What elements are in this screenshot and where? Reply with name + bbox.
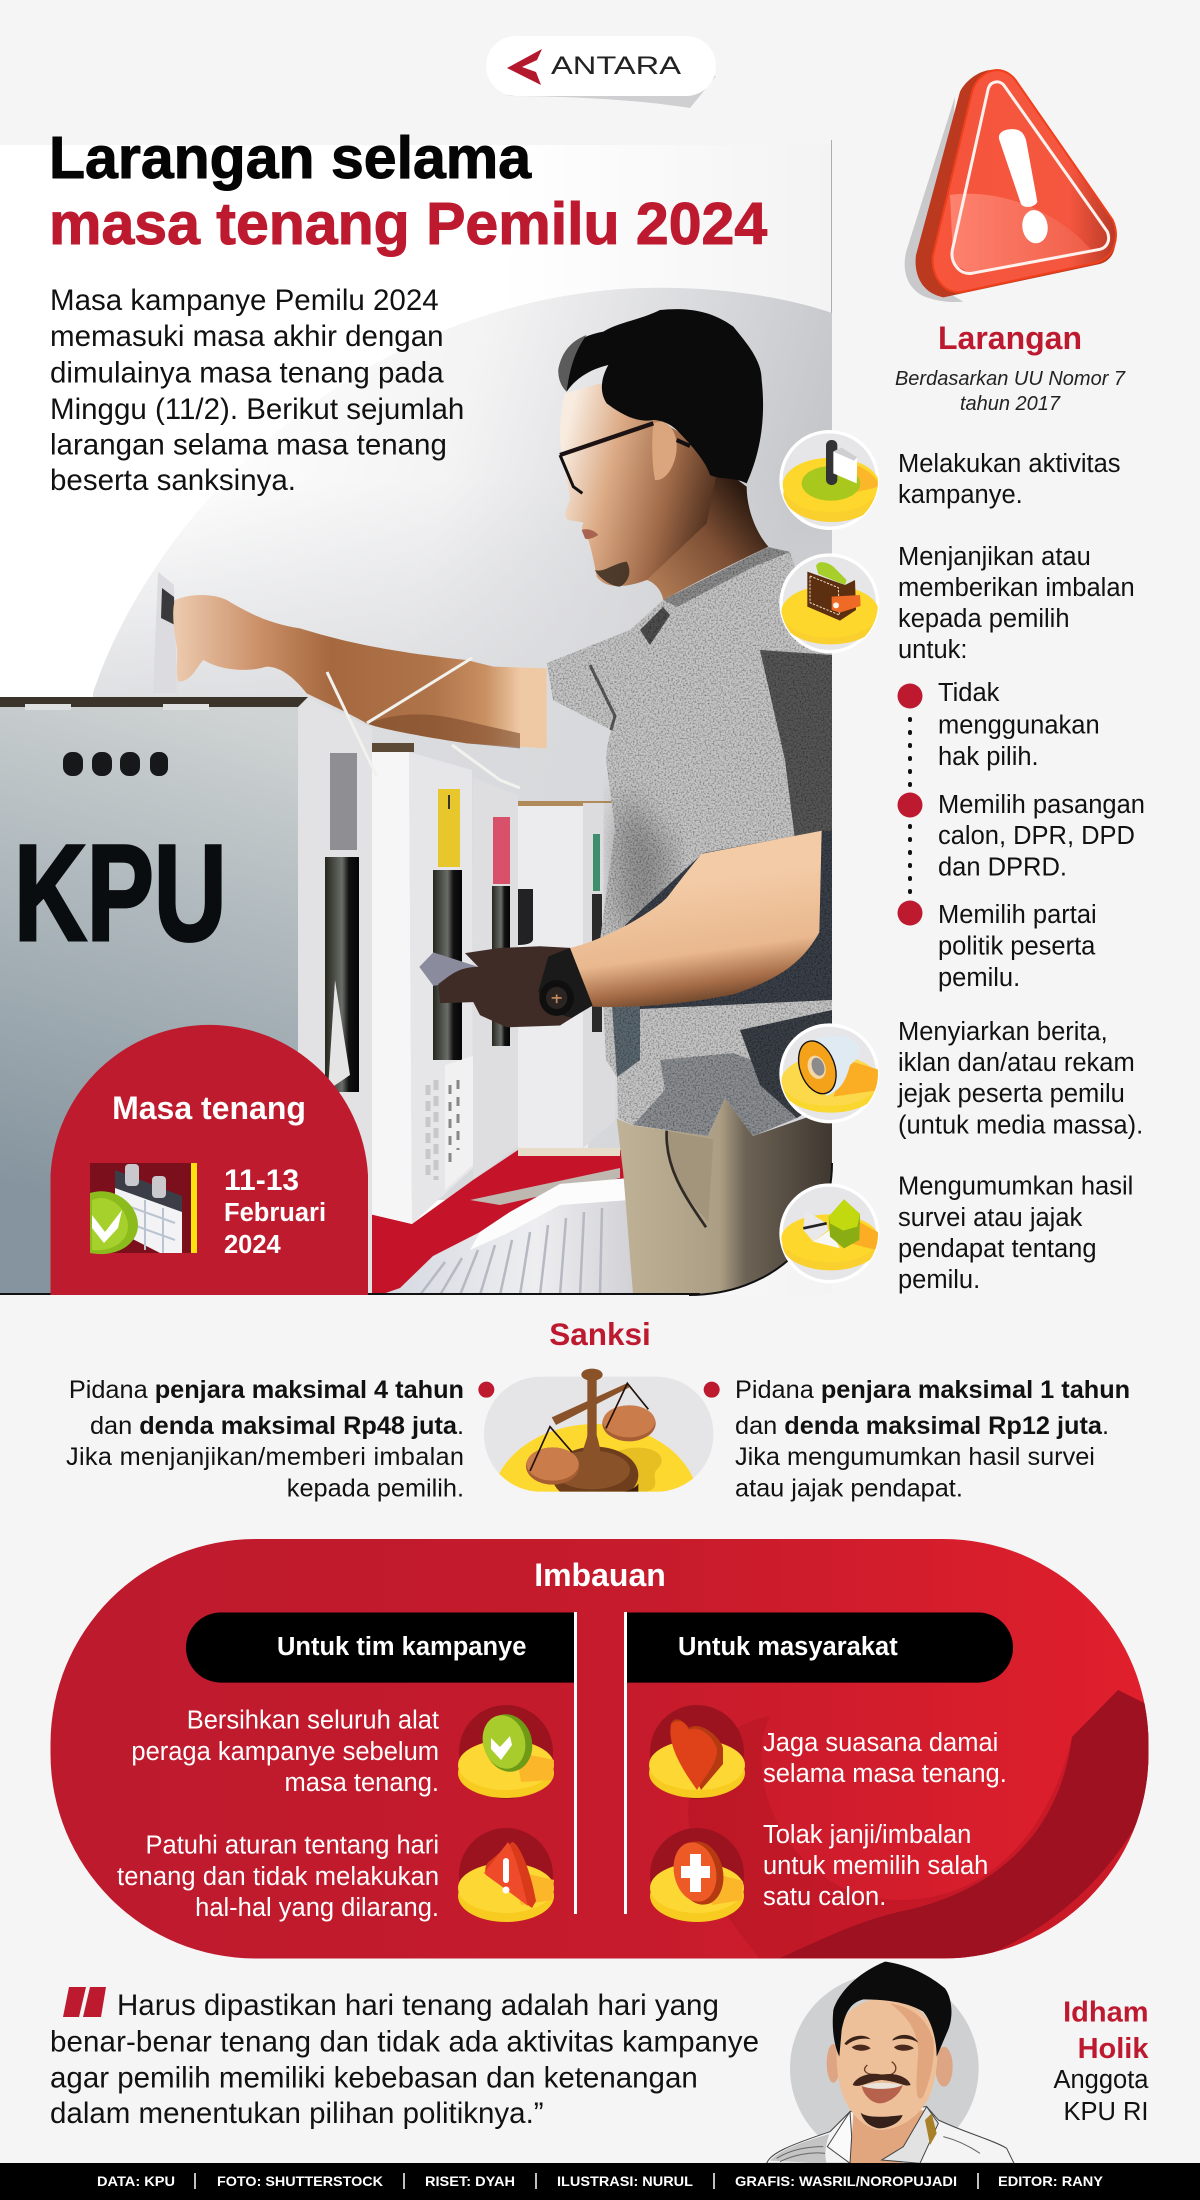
speaker name and role: Anggota [1053, 2066, 1149, 2094]
sanction text: left: Pidana penjara maksimal 4 tahun [69, 1376, 464, 1404]
icon: wallet on yellow disc [779, 553, 879, 653]
list: prohibitions: dan DPRD. [938, 854, 1067, 882]
icon: heart [649, 1705, 745, 1799]
list: prohibitions: Menyiarkan berita, [898, 1018, 1108, 1046]
box 2 [371, 743, 473, 1224]
footer credits bar: ILUSTRASI: NURUL [557, 2174, 693, 2189]
header: Untuk masyarakat [626, 1612, 1013, 1683]
KPU ballot box [0, 697, 372, 1295]
intro paragraph: memasuki masa akhir dengan [50, 320, 444, 353]
text: public advice: satu calon. [763, 1883, 886, 1911]
footer credits bar [0, 2163, 1200, 2200]
list: prohibitions: pemilu. [938, 964, 1020, 992]
icon: speaker on yellow disc [779, 1023, 880, 1123]
sanction text: left: Jika menjanjikan/memberi imbalan [66, 1443, 464, 1471]
sanction text: right: Jika mengumumkan hasil survei [735, 1443, 1095, 1471]
photo bottom-right curved border [689, 1163, 832, 1295]
list: prohibitions: menggunakan [938, 712, 1100, 740]
speaker name and role: Holik [1078, 2033, 1149, 2065]
sanction text: right: dan denda maksimal Rp12 juta. [735, 1412, 1109, 1440]
list: prohibitions: memberikan imbalan [898, 574, 1135, 602]
header: Untuk tim kampanye [186, 1612, 574, 1683]
intro paragraph: larangan selama masa tenang [50, 428, 447, 462]
logo: ANTARA: ANTARA [551, 52, 681, 80]
list: prohibitions: jejak peserta pemilu [897, 1080, 1125, 1108]
intro paragraph: beserta sanksinya. [50, 464, 296, 497]
intro paragraph: dimulainya masa tenang pada [50, 356, 444, 390]
text: campaign team advice: tenang dan tidak melakukan [117, 1863, 439, 1891]
title [49, 125, 767, 257]
legal basis note [895, 368, 1126, 415]
folded ballots [419, 952, 478, 986]
man: pants [617, 1098, 833, 1298]
quote text: dalam menentukan pilihan politiknya.” [50, 2097, 544, 2130]
logo: ANTARA [486, 36, 716, 108]
red carpet [365, 1150, 625, 1295]
white table skirt [380, 1178, 640, 1295]
grey backdrop arc [60, 288, 840, 1200]
badge: masa tenang [50, 1025, 368, 1295]
list: prohibitions [897, 450, 1145, 1294]
footer credits bar: EDITOR: RANY [998, 2174, 1103, 2189]
list: prohibitions: untuk: [898, 636, 967, 664]
list: prohibitions: Memilih partai [938, 901, 1097, 929]
title: masa tenang Pemilu 2024 [49, 191, 767, 257]
icon: survey box on yellow disc [779, 1183, 880, 1283]
panel divider line [831, 140, 832, 1170]
legal basis note: tahun 2017 [960, 393, 1061, 415]
zip ties [327, 658, 520, 788]
sanction text: left: dan denda maksimal Rp48 juta. [90, 1412, 464, 1440]
heading: Larangan: Larangan [938, 320, 1082, 356]
list: prohibitions: survei atau jajak [898, 1204, 1083, 1232]
sanction text: right: atau jajak pendapat. [735, 1474, 963, 1502]
extended arm [173, 595, 547, 748]
text: campaign team advice: hal-hal yang dilarang. [195, 1894, 439, 1922]
sanction text: left [66, 1376, 464, 1502]
sub-list of vote-related conditions [898, 684, 922, 926]
ballot paper in hand [154, 572, 176, 664]
footer credits bar: GRAFIS: WASRIL/NOROPUJADI [735, 2174, 957, 2189]
sanction text: right: Pidana penjara maksimal 1 tahun [735, 1376, 1130, 1404]
text: campaign team advice: masa tenang. [284, 1769, 439, 1797]
icon: warning triangle [905, 70, 1116, 302]
list: prohibitions: Mengumumkan hasil [898, 1173, 1133, 1201]
list: prohibitions: pendapat tentang [898, 1235, 1097, 1263]
icon: green check [458, 1705, 554, 1799]
header: Untuk masyarakat: Untuk masyarakat [678, 1633, 898, 1661]
footer credits bar: FOTO: SHUTTERSTOCK [217, 2174, 383, 2189]
list: prohibitions: Memilih pasangan [938, 791, 1145, 819]
icon: red cross [650, 1828, 744, 1922]
list: prohibitions: calon, DPR, DPD [938, 822, 1135, 850]
text: public advice: selama masa tenang. [763, 1760, 1007, 1788]
badge: masa tenang: Februari [224, 1199, 326, 1227]
quote text: benar-benar tenang dan tidak ada aktivitas kampanye [50, 2026, 759, 2059]
man: head [558, 309, 768, 600]
man: forearm and watch [419, 831, 822, 1027]
KPU lettering: KPU [14, 817, 227, 970]
footer credits bar: DATA: KPU [97, 2174, 175, 2189]
text: campaign team advice: peraga kampanye sebelum [131, 1738, 439, 1766]
quote text: agar pemilih memiliki kebebasan dan ketenangan [50, 2062, 698, 2095]
list: prohibitions: kampanye. [898, 481, 1023, 509]
quote text [50, 1989, 759, 2130]
list: prohibitions: Melakukan aktivitas [898, 450, 1121, 478]
icon: red warning [458, 1828, 554, 1922]
badge: masa tenang: Masa tenang [112, 1090, 306, 1126]
header: Untuk tim kampanye: Untuk tim kampanye [277, 1633, 526, 1661]
icon: calendar [90, 1163, 197, 1254]
quote marks [63, 1987, 106, 2017]
text: public advice: Tolak janji/imbalan [763, 1821, 971, 1849]
text: public advice [763, 1729, 1007, 1911]
speaker name and role [1053, 1997, 1149, 2126]
list: prohibitions: Menjanjikan atau [898, 543, 1091, 571]
panel: Imbauan [50, 1539, 1150, 1960]
list: prohibitions: pemilu. [898, 1266, 980, 1294]
list: prohibitions: kepada pemilih [898, 605, 1070, 633]
intro paragraph: Masa kampanye Pemilu 2024 [50, 284, 439, 317]
text: campaign team advice: Patuhi aturan tentang hari [146, 1832, 439, 1860]
quote text: Harus dipastikan hari tenang adalah hari yang [117, 1989, 719, 2022]
sanction text: right [735, 1376, 1130, 1502]
list: prohibitions: Tidak [938, 679, 1000, 707]
list: prohibitions: (untuk media massa). [898, 1112, 1143, 1140]
heading: Imbauan: Imbauan [534, 1557, 666, 1593]
badge: masa tenang: 2024 [224, 1231, 282, 1259]
legal basis note: Berdasarkan UU Nomor 7 [895, 368, 1126, 390]
man: torso shirt [547, 547, 832, 1136]
list: prohibitions: politik peserta [938, 932, 1096, 960]
sanction text: left: kepada pemilih. [287, 1474, 464, 1502]
photo: voter at ballot boxes [0, 288, 840, 1298]
footer credits bar: RISET: DYAH [425, 2174, 515, 2189]
portrait: Idham Holik [767, 1962, 1014, 2163]
intro paragraph: Minggu (11/2). Berikut sejumlah [50, 393, 464, 426]
speaker name and role: KPU RI [1063, 2098, 1148, 2126]
white left panel [0, 145, 832, 1295]
intro paragraph [50, 284, 464, 497]
list: prohibitions: hak pilih. [938, 743, 1039, 771]
text: campaign team advice [117, 1707, 439, 1922]
distant ballot boxes [492, 801, 612, 1148]
title: Larangan selama [49, 125, 532, 191]
text: campaign team advice: Bersihkan seluruh alat [187, 1707, 439, 1735]
badge: masa tenang: 11-13 [224, 1164, 299, 1197]
icon: scales of justice [478, 1368, 720, 1492]
speaker name and role: Idham [1063, 1997, 1148, 2029]
list: prohibitions: iklan dan/atau rekam [898, 1049, 1135, 1077]
text: public advice: Jaga suasana damai [763, 1729, 998, 1757]
heading: Sanksi: Sanksi [549, 1316, 651, 1352]
icon: flag on yellow disc [779, 430, 880, 530]
text: public advice: untuk memilih salah [763, 1852, 988, 1880]
